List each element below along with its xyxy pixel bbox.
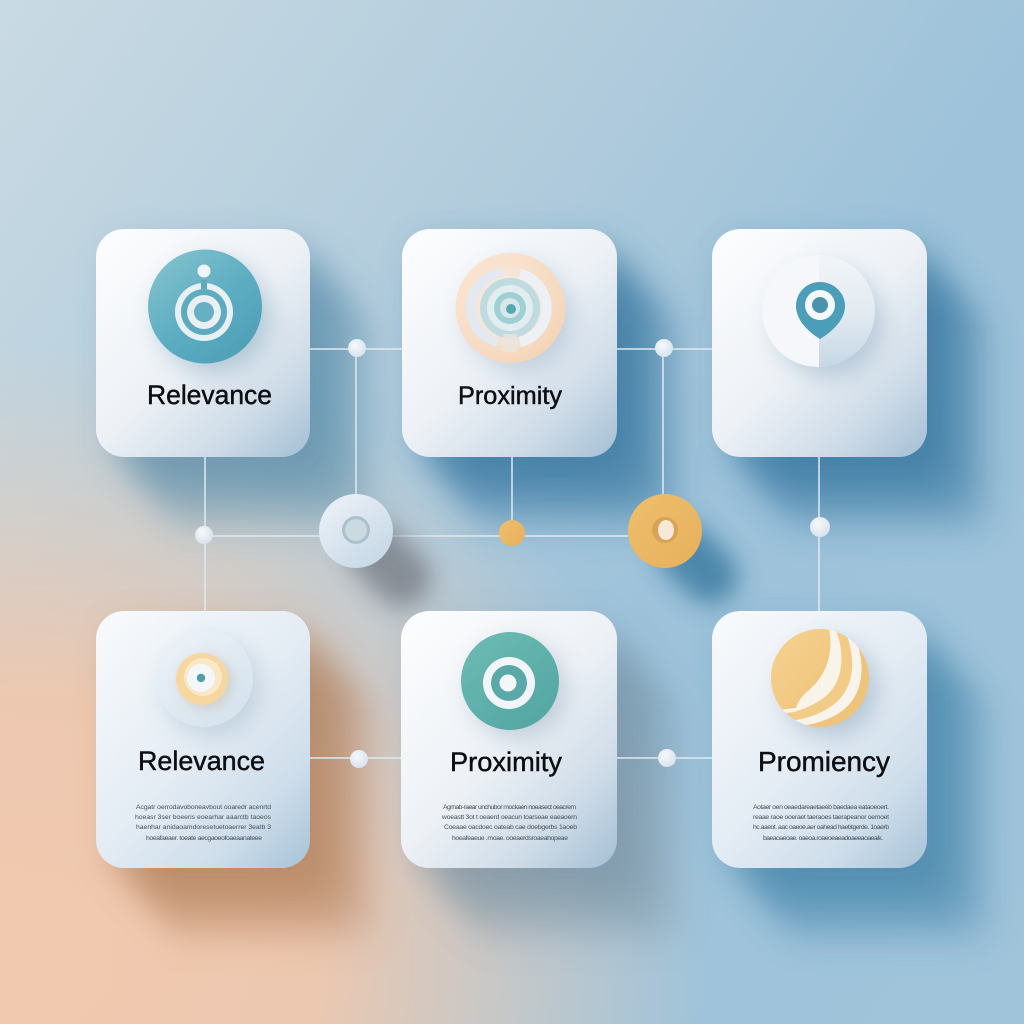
text block: Agmab-raear unchubor mockaen noeasect oeacrem bbox=[443, 804, 576, 811]
title: Relevance: Relevance bbox=[138, 746, 265, 776]
connector node: bottom right bbox=[658, 749, 676, 767]
icon: peach swirl bbox=[456, 253, 573, 371]
big node: orange bbox=[628, 494, 710, 576]
panel: proximity top bbox=[402, 229, 617, 457]
small node: orange bbox=[499, 520, 525, 546]
text block: hoeafaeaer. toeate aecgaoeofoaeaanateee bbox=[146, 835, 262, 842]
text block: woeastt 3ot t oeaerd oeacun toarseae eaeaoern bbox=[441, 814, 577, 821]
title: Promiency: Promiency bbox=[758, 746, 890, 777]
connector node: bottom left bbox=[350, 750, 368, 768]
text block bbox=[753, 804, 889, 842]
connector node: middle left bbox=[195, 526, 213, 544]
text block: haenhar anidaoamdoresetuetoaerrer 3eatb 3 bbox=[136, 824, 271, 831]
icon: peach target on disc bbox=[155, 629, 260, 736]
text block: Aotaer oen oeaedareaetaeeb baedaea eataoeoert. bbox=[753, 804, 889, 811]
icon: green target bbox=[461, 632, 566, 738]
text block: hoeasr 3ser boeeris eoearhar aaarctb taoeos bbox=[135, 814, 272, 821]
text block: hc.aaeot. aac oaeoe.aer oahead haebtgerde. 1oaerb bbox=[753, 824, 889, 831]
connector node: middle right bbox=[810, 517, 830, 537]
title: Relevance: Relevance bbox=[147, 380, 272, 410]
text block: hoeafeaeue .moae. ooeaerdsroaeahopeae bbox=[452, 835, 568, 842]
icon: location pin on disc bbox=[762, 255, 882, 376]
connector lines bbox=[205, 349, 819, 758]
panel: relevance top bbox=[96, 229, 310, 457]
big node: white bbox=[319, 494, 402, 578]
text block: Coeaae oacdoec oateab cae doebgerbs 1aoeb bbox=[444, 824, 577, 831]
panel: relevance bottom bbox=[96, 611, 310, 868]
connector node: top left bbox=[348, 339, 366, 357]
text block: baeaoaeoae. oaeoa.roaeoeaeadoaeeaoaeaik. bbox=[763, 835, 883, 842]
panel: prominency bottom bbox=[712, 611, 927, 868]
text block: reaae raoe ooeraet taeraoes taerapeanor oemoet bbox=[753, 814, 889, 821]
icon: gold striped sphere bbox=[760, 620, 878, 737]
title: Proximity: Proximity bbox=[450, 746, 562, 777]
title: Proximity: Proximity bbox=[458, 382, 562, 410]
icon: target with dot bbox=[148, 250, 269, 372]
text block: Acgatr oerrodavoboneavbout ooaredr acenrtd bbox=[136, 804, 271, 811]
card shadows bbox=[103, 237, 996, 948]
panel: location top bbox=[712, 229, 927, 457]
text block bbox=[441, 804, 577, 842]
panel: proximity bottom bbox=[401, 611, 617, 868]
text block bbox=[135, 804, 272, 842]
connector node: top right bbox=[655, 339, 673, 357]
